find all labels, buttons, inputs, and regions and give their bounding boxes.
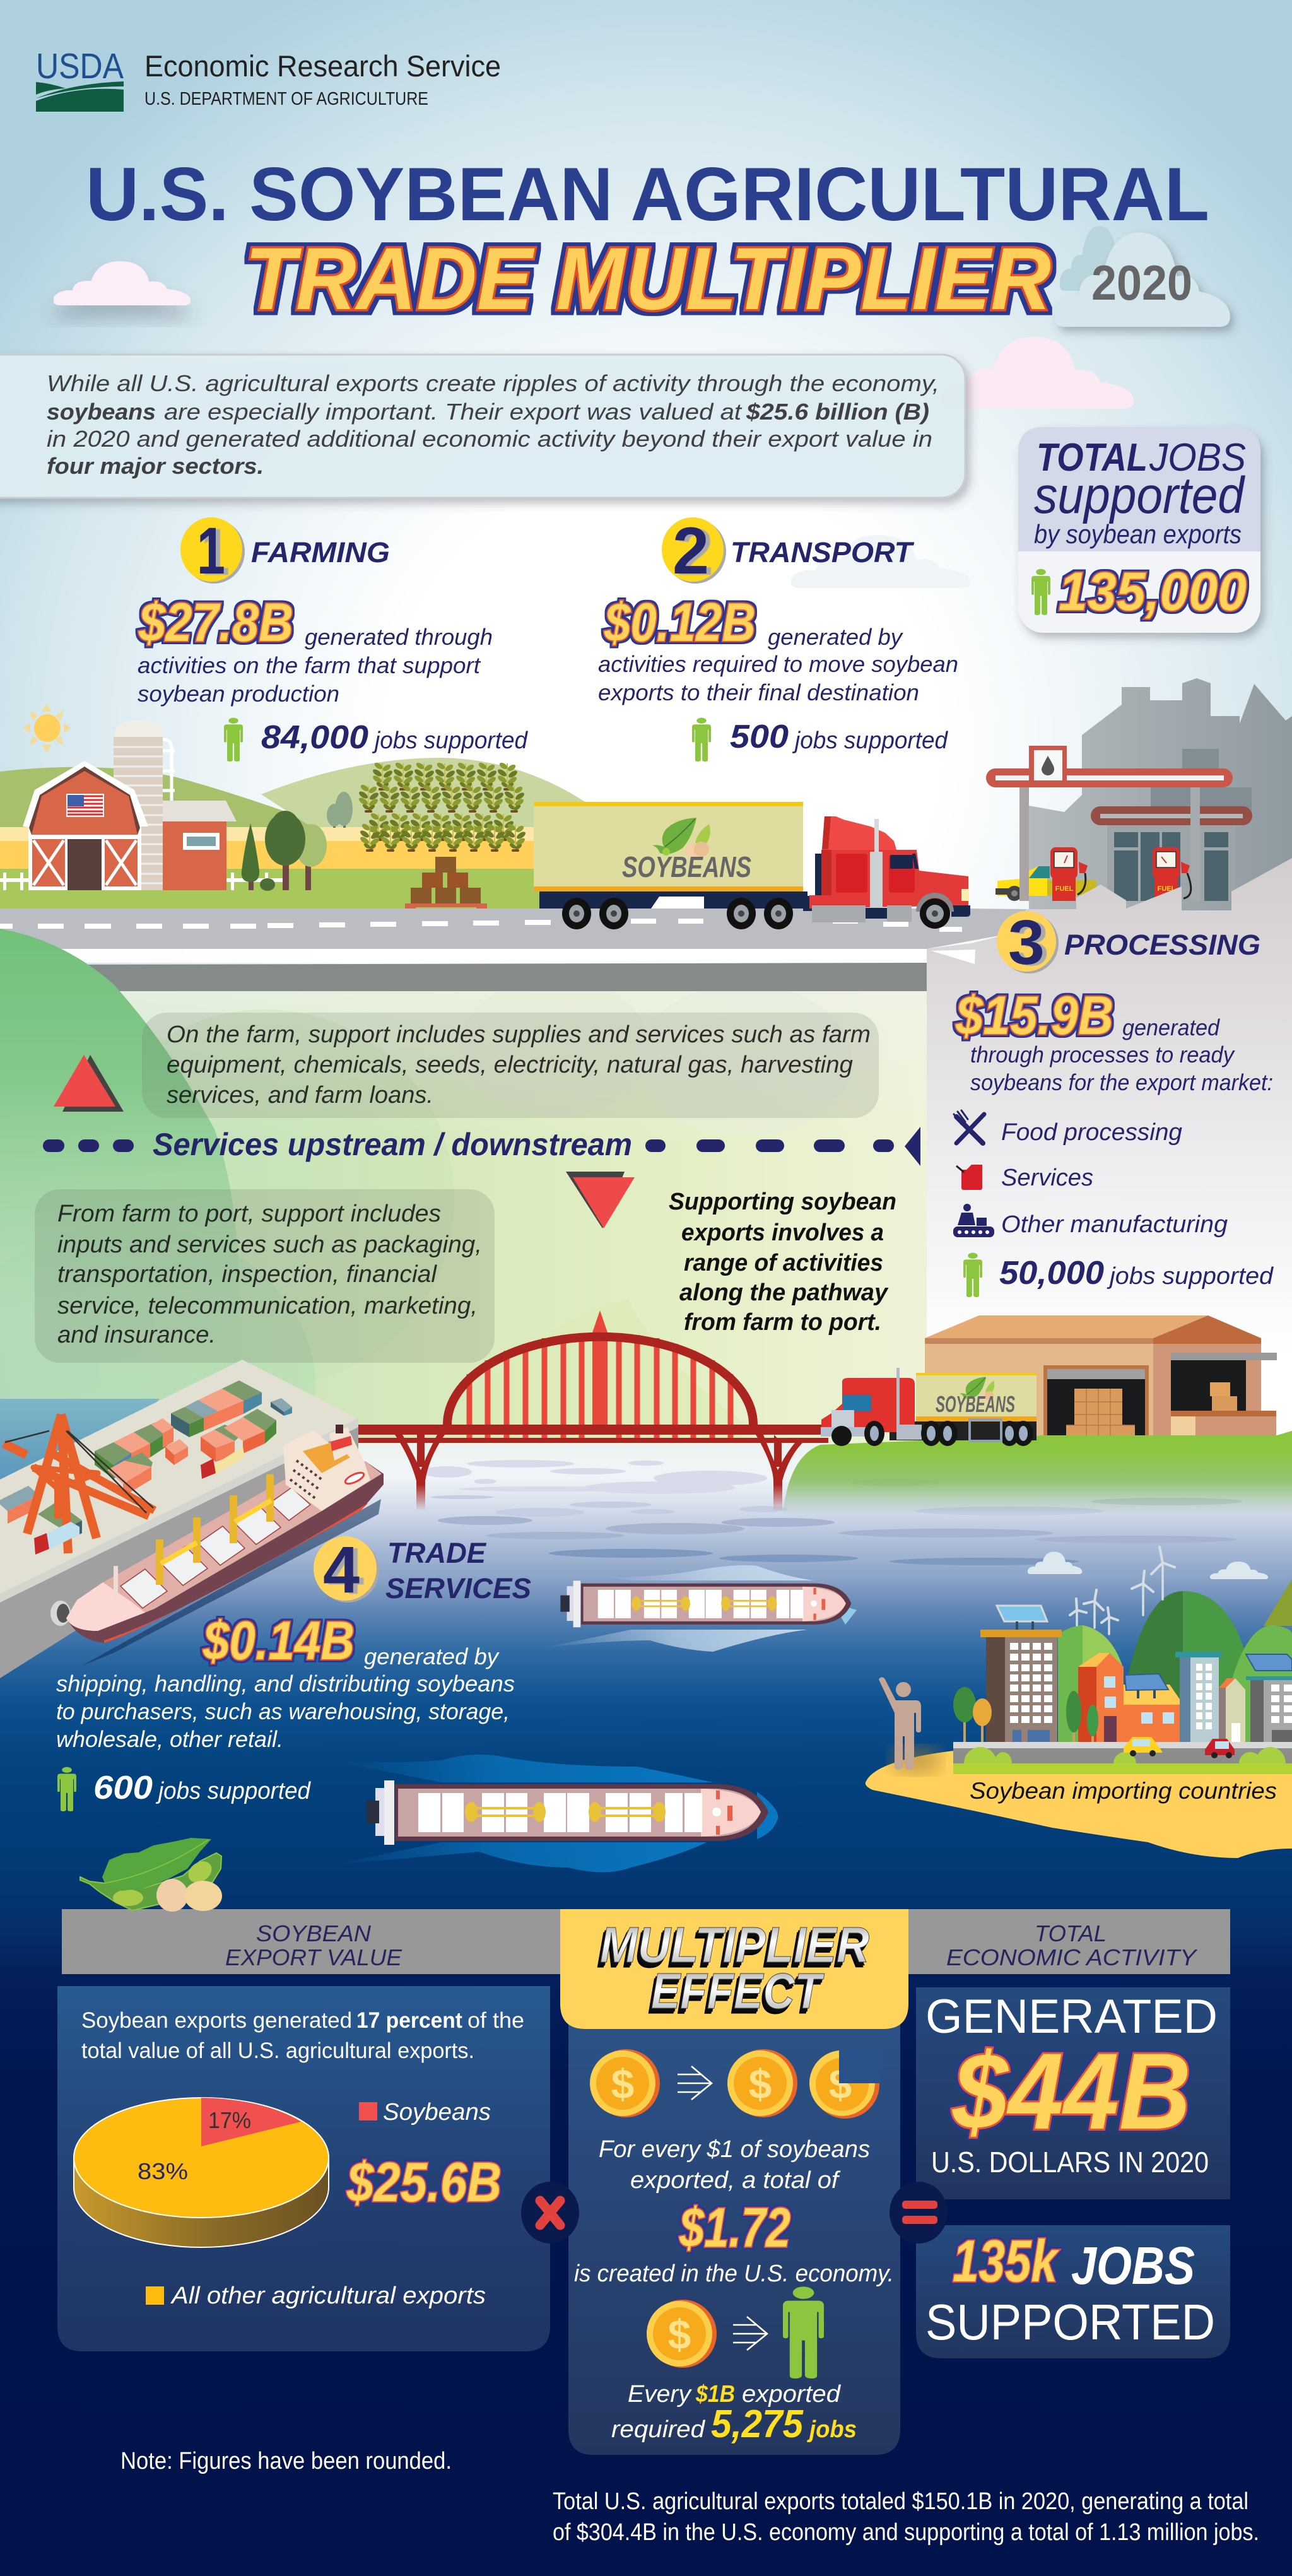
title line 1: U.S. SOYBEAN AGRICULTURAL bbox=[86, 152, 1209, 237]
sector 1 heading: farming: FARMING bbox=[251, 536, 390, 568]
intro text panel: four major sectors. bbox=[47, 453, 264, 479]
icon: fork and knife bbox=[954, 1110, 984, 1143]
sector 4 jobs bbox=[57, 1767, 312, 1811]
importing countries island and city bbox=[866, 1547, 1292, 1858]
text block: supporting soybean exports: Supporting soybean bbox=[669, 1189, 896, 1215]
sector 2 figure and description: $0.12B bbox=[604, 592, 756, 653]
icon: partial dollar coin bbox=[809, 2050, 881, 2119]
scene: distant trees bbox=[327, 792, 353, 828]
arrow: upstream triangle bbox=[54, 1055, 124, 1112]
list item: food processing: Food processing bbox=[1001, 1119, 1182, 1146]
sector 2 figure and description: exports to their final destination bbox=[598, 679, 919, 705]
legend: all other agricultural exports: All other agricultural exports bbox=[170, 2283, 486, 2309]
sector 4 figure and description: $0.14B bbox=[203, 1611, 355, 1671]
ship: top view small with wake bbox=[543, 1565, 857, 1652]
logo: USDA Economic Research Service: U.S. DEPARTMENT OF AGRICULTURE bbox=[144, 89, 428, 109]
sector 3 figure and description: soybeans for the export market: bbox=[970, 1069, 1273, 1095]
panel: jobs supported: SUPPORTED bbox=[925, 2294, 1215, 2350]
text: for every dollar: exported, a total of bbox=[630, 2167, 841, 2194]
text: every one billion: $1B bbox=[695, 2381, 735, 2408]
scene: green hill bbox=[0, 929, 240, 1443]
icon: dollar coin bbox=[590, 2049, 660, 2117]
sector 2 figure and description: generated by bbox=[768, 624, 903, 650]
text panel: farm to port: and insurance. bbox=[57, 1322, 216, 1348]
sector 3 heading: processing bbox=[997, 907, 1260, 978]
callout: total jobs supported: TOTAL bbox=[1037, 436, 1148, 479]
panel: jobs supported bbox=[916, 2225, 1230, 2358]
sector 4 figure and description: generated by bbox=[364, 1644, 500, 1669]
person waving bbox=[879, 1677, 921, 1770]
intro text panel: are especially important. Their export was valued at bbox=[164, 399, 743, 425]
text panel: on the farm: On the farm, support includes supplies and services such as farm bbox=[167, 1021, 871, 1048]
sector 4 heading: trade services: SERVICES bbox=[385, 1572, 531, 1604]
truck: soybeans: SOYBEANS bbox=[622, 850, 751, 883]
icon: dollar coin to job: $ bbox=[668, 2311, 691, 2358]
dashed line: services upstream / downstream bbox=[43, 1127, 920, 1166]
icon: sun bbox=[23, 703, 71, 753]
port with containers and crane bbox=[0, 1360, 358, 1678]
text panel: on the farm bbox=[142, 1013, 879, 1118]
sector 4 figure and description: wholesale, other retail. bbox=[56, 1726, 283, 1752]
sector 4 heading: trade services: 4 bbox=[323, 1533, 360, 1607]
road stripe decoration bbox=[931, 950, 975, 964]
intro text panel: soybeans bbox=[47, 399, 156, 425]
sector 3 figure and description bbox=[955, 985, 1273, 1095]
logo: USDA Economic Research Service bbox=[36, 46, 501, 112]
intro text panel: in 2020 and generated additional economic activity beyond their export value in bbox=[47, 426, 932, 452]
sector 3 figure and description: through processes to ready bbox=[970, 1042, 1235, 1067]
text: for every dollar: For every $1 of soybeans bbox=[599, 2136, 870, 2163]
text panel: farm to port: inputs and services such as packaging, bbox=[57, 1232, 482, 1258]
sector 1 jobs: jobs supported bbox=[372, 727, 529, 754]
sector 4 figure and description: shipping, handling, and distributing soybeans bbox=[56, 1671, 515, 1697]
text panel: on the farm: equipment, chemicals, seeds, electricity, natural gas, harvesting bbox=[167, 1052, 853, 1078]
scene: left sea bbox=[0, 1399, 160, 1596]
sector 1 jobs: 84,000 bbox=[261, 719, 368, 756]
header: gray band with column titles: ECONOMIC ACTIVITY bbox=[946, 1944, 1198, 1970]
panel: soybean export value: of the bbox=[467, 2008, 524, 2033]
text block: supporting soybean exports: range of activities bbox=[684, 1250, 883, 1276]
text block: supporting soybean exports: from farm to port. bbox=[684, 1309, 881, 1336]
sector 4 figure and description: to purchasers, such as warehousing, storage, bbox=[56, 1698, 510, 1724]
text: every one billion: Every bbox=[628, 2381, 692, 2408]
callout: total jobs supported: supported bbox=[1034, 467, 1245, 524]
warehouse bbox=[925, 1315, 1277, 1435]
scene: trees bbox=[242, 811, 327, 891]
sector 1 heading: farming bbox=[180, 514, 390, 588]
sector 2 heading: transport: TRANSPORT bbox=[731, 536, 915, 568]
legend: soybeans: Soybeans bbox=[383, 2099, 491, 2126]
background: water bbox=[0, 1432, 1292, 2576]
sector 2 jobs: jobs supported bbox=[792, 727, 949, 754]
icon: dollar coin: $ bbox=[611, 2061, 634, 2107]
panel: total economic activity generated: U.S. DOLLARS IN 2020 bbox=[931, 2146, 1209, 2179]
panel: total economic activity generated: $44B bbox=[952, 2031, 1191, 2152]
panel: soybean export value bbox=[57, 1986, 550, 2351]
panel: soybean export value: Soybean exports generated bbox=[81, 2008, 352, 2033]
note: totals bbox=[553, 2488, 1259, 2546]
dashed line: services upstream / downstream: Services upstream / downstream bbox=[153, 1127, 632, 1162]
icon: partial dollar coin: $ bbox=[829, 2061, 852, 2107]
text panel: farm to port: transportation, inspection, financial bbox=[57, 1261, 438, 1288]
panel: total economic activity generated bbox=[916, 1987, 1230, 2199]
background: sky bbox=[0, 0, 1292, 1022]
icon: dollar coin: $ bbox=[749, 2061, 772, 2107]
header: gray band with column titles: TOTAL bbox=[1035, 1920, 1107, 1946]
cloud badge: 2020: 2020 bbox=[1091, 255, 1192, 310]
sector 1 figure and description: generated through bbox=[305, 624, 493, 650]
sector 2 heading: transport: 2 bbox=[672, 514, 709, 588]
small truck: soybeans bbox=[821, 1368, 1037, 1446]
scene: silo bbox=[114, 720, 175, 890]
scene: shed bbox=[163, 801, 237, 890]
icon: multiply sign bbox=[521, 2182, 579, 2244]
sector 2 figure and description bbox=[598, 592, 958, 705]
icon: manufacturing conveyor bbox=[953, 1204, 994, 1237]
panel: soybean export value: total value of all U.S. agricultural exports. bbox=[81, 2038, 474, 2063]
arrow: downstream triangle bbox=[566, 1172, 635, 1228]
sector 2 heading: transport bbox=[662, 514, 915, 588]
scene: farm hills and fields bbox=[0, 758, 621, 909]
gas station: FUEL bbox=[1055, 885, 1074, 893]
container stack: upper bbox=[171, 1380, 262, 1437]
sector 4 heading: trade services: TRADE bbox=[387, 1537, 487, 1569]
small trucks on port bbox=[34, 1447, 245, 1555]
icon: dollar coin to job bbox=[647, 2286, 824, 2379]
bridge bbox=[358, 1310, 883, 1511]
list item: services: Services bbox=[1001, 1165, 1093, 1191]
value: multiplier: $1.72 bbox=[679, 2196, 790, 2259]
callout: total jobs supported: by soybean exports bbox=[1034, 519, 1242, 549]
sector 1 figure and description: $27.8B bbox=[138, 592, 293, 653]
text: every one billion: exported bbox=[742, 2381, 842, 2408]
gas station bbox=[986, 746, 1252, 901]
sector 1 jobs bbox=[224, 718, 529, 762]
note: figures rounded: Note: Figures have been rounded. bbox=[120, 2448, 452, 2474]
text block: supporting soybean exports: along the pathway bbox=[679, 1279, 889, 1306]
icon: fuel can bbox=[956, 1165, 982, 1190]
sector 3 heading: processing: PROCESSING bbox=[1064, 929, 1260, 961]
header: gray band with column titles: SOYBEAN bbox=[256, 1920, 372, 1946]
decorative pink cloud left bbox=[53, 261, 191, 305]
logo: USDA Economic Research Service: Economic Research Service bbox=[144, 49, 501, 83]
text: for every dollar bbox=[599, 2136, 870, 2194]
header tab: multiplier effect: EFFECT bbox=[651, 1963, 825, 2019]
panel: processing background bbox=[927, 858, 1292, 1445]
header: gray band with column titles: EXPORT VALUE bbox=[225, 1944, 402, 1970]
panel: total economic activity generated: GENERATED bbox=[925, 1990, 1218, 2044]
header: gray band with column titles bbox=[62, 1909, 1230, 1974]
header tab: multiplier effect: MULTIPLIER bbox=[600, 1917, 869, 1973]
scene: soybean plants bbox=[358, 762, 526, 852]
value: export value: $25.6B bbox=[346, 2151, 502, 2213]
road bbox=[0, 909, 1026, 991]
crane bbox=[4, 1414, 155, 1553]
container stack: middle bbox=[95, 1423, 167, 1479]
icon: dollar coin bbox=[727, 2049, 797, 2117]
water waves bbox=[421, 1460, 1243, 1587]
intro text panel: While all U.S. agricultural exports create ripples of activity through the economy, bbox=[47, 370, 939, 396]
sector 1 heading: farming: 1 bbox=[197, 514, 225, 588]
scene: fence bbox=[0, 873, 283, 890]
callout: total jobs supported bbox=[1018, 427, 1260, 633]
sector 3 jobs: 50,000 bbox=[999, 1255, 1104, 1291]
sector 3 figure and description: generated bbox=[1122, 1015, 1220, 1040]
panel: jobs supported: 135k bbox=[953, 2228, 1060, 2294]
sector 4 jobs: 600 bbox=[93, 1770, 153, 1806]
text panel: on the farm: services, and farm loans. bbox=[167, 1082, 433, 1109]
container: single boxes bbox=[151, 1398, 292, 1465]
ship: top view large with wake bbox=[334, 1755, 778, 1873]
text: every one billion: jobs bbox=[806, 2416, 857, 2443]
sector 4 heading: trade services bbox=[314, 1533, 531, 1607]
container stack: right bbox=[201, 1409, 276, 1462]
intro text panel bbox=[0, 355, 965, 498]
sector 4 jobs: jobs supported bbox=[155, 1778, 312, 1804]
sector 2 jobs: 500 bbox=[730, 719, 789, 755]
sector 2 jobs bbox=[692, 718, 949, 762]
text: every one billion bbox=[611, 2381, 857, 2446]
sector 3 figure and description: $15.9B bbox=[955, 985, 1113, 1046]
header tab: multiplier effect bbox=[560, 1909, 908, 2029]
callout: total jobs supported: 135,000 bbox=[1059, 562, 1247, 622]
sector 1 figure and description bbox=[138, 592, 493, 707]
faint cloud behind transport bbox=[790, 535, 971, 588]
truck: soybeans bbox=[534, 802, 970, 929]
intro text panel: $25.6 billion (B) bbox=[746, 399, 929, 425]
text: every one billion: required bbox=[611, 2416, 706, 2443]
panel: soybean export value: 17 percent bbox=[356, 2008, 462, 2033]
icon: equals sign bbox=[890, 2182, 948, 2244]
sector 4 figure and description bbox=[56, 1611, 515, 1752]
scene: stacked crates on pallet bbox=[405, 857, 487, 912]
text panel: farm to port bbox=[35, 1189, 495, 1363]
cloud badge: 2020 bbox=[1054, 226, 1230, 327]
pie chart: 17 percent soybeans, 83 percent other: 17% bbox=[208, 2107, 251, 2133]
small truck: soybeans: SOYBEANS bbox=[936, 1391, 1015, 1417]
callout: total jobs supported: JOBS bbox=[1149, 436, 1246, 479]
sector 1 figure and description: activities on the farm that support bbox=[138, 652, 481, 678]
sector 2 figure and description: activities required to move soybean bbox=[598, 651, 958, 677]
sector 1 figure and description: soybean production bbox=[138, 681, 339, 707]
panel: multiplier effect center bbox=[560, 1909, 908, 2455]
container stack: by crane bbox=[0, 1452, 153, 1543]
logo: USDA Economic Research Service: USDA bbox=[36, 46, 124, 86]
icon: soybean leaf and pods bbox=[80, 1838, 222, 1912]
sector 3 jobs: jobs supported bbox=[1107, 1263, 1274, 1290]
sector 3 jobs bbox=[963, 1253, 1274, 1297]
text block: supporting soybean exports bbox=[669, 1189, 896, 1336]
scene: red barn with flag bbox=[23, 761, 148, 890]
title line 2: trade multiplier: TRADE MULTIPLIER bbox=[245, 229, 1051, 328]
cargo ship at port bbox=[50, 1425, 384, 1666]
text: every one billion: 5,275 bbox=[711, 2403, 804, 2446]
importing countries island and city: Soybean importing countries bbox=[970, 1778, 1277, 1804]
gas station: FUEL bbox=[1158, 885, 1176, 893]
icon: arrow bbox=[678, 2066, 712, 2100]
list item: other manufacturing: Other manufacturing bbox=[1001, 1211, 1228, 1238]
background: middle service zone bbox=[0, 991, 927, 1443]
text panel: farm to port: service, telecommunication, marketing, bbox=[57, 1293, 478, 1319]
panel: jobs supported: JOBS bbox=[1071, 2236, 1195, 2295]
scene: green shore bbox=[783, 1431, 1292, 1514]
text block: supporting soybean exports: exports involves a bbox=[681, 1220, 884, 1246]
scene: city silhouette behind gas station bbox=[1029, 678, 1292, 912]
text: created in economy: is created in the U.S. economy. bbox=[574, 2261, 894, 2287]
text panel: farm to port: From farm to port, support includes bbox=[57, 1201, 441, 1227]
pie chart: 17 percent soybeans, 83 percent other: 83% bbox=[138, 2158, 188, 2184]
decorative pink cloud right bbox=[939, 337, 1134, 409]
sector 3 heading: processing: 3 bbox=[1008, 907, 1045, 978]
pie chart: 17 percent soybeans, 83 percent other bbox=[74, 2098, 329, 2247]
